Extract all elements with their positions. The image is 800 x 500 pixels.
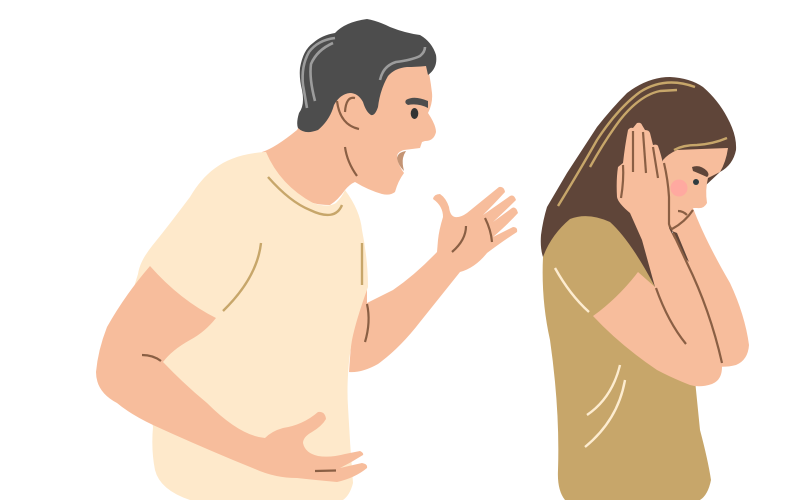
man t-shirt <box>130 152 368 500</box>
man raised forearm and open hand <box>349 187 518 372</box>
man eyebrow <box>405 98 428 108</box>
woman far arm <box>672 208 749 367</box>
figure: man <box>96 19 518 500</box>
woman blush <box>670 180 688 196</box>
woman near arm and hand <box>593 123 722 386</box>
woman hair highlights <box>558 83 727 206</box>
woman shirt detail lines <box>555 268 625 447</box>
woman face <box>655 148 728 230</box>
woman skin detail lines <box>621 131 722 363</box>
man eye <box>411 108 418 119</box>
woman t-shirt <box>543 216 711 500</box>
man open mouth <box>397 151 406 171</box>
man lower arm and hand on stomach <box>96 266 367 482</box>
figure: woman <box>541 77 749 500</box>
man head and neck <box>262 60 436 205</box>
woman hair sliver between arms <box>672 231 689 262</box>
man shirt seams <box>223 177 362 311</box>
man hair highlights <box>303 38 425 108</box>
woman eye <box>693 179 699 185</box>
man skin detail lines <box>142 98 492 471</box>
woman hair <box>541 77 736 292</box>
woman eyebrow <box>692 166 708 177</box>
man hair <box>297 19 436 132</box>
